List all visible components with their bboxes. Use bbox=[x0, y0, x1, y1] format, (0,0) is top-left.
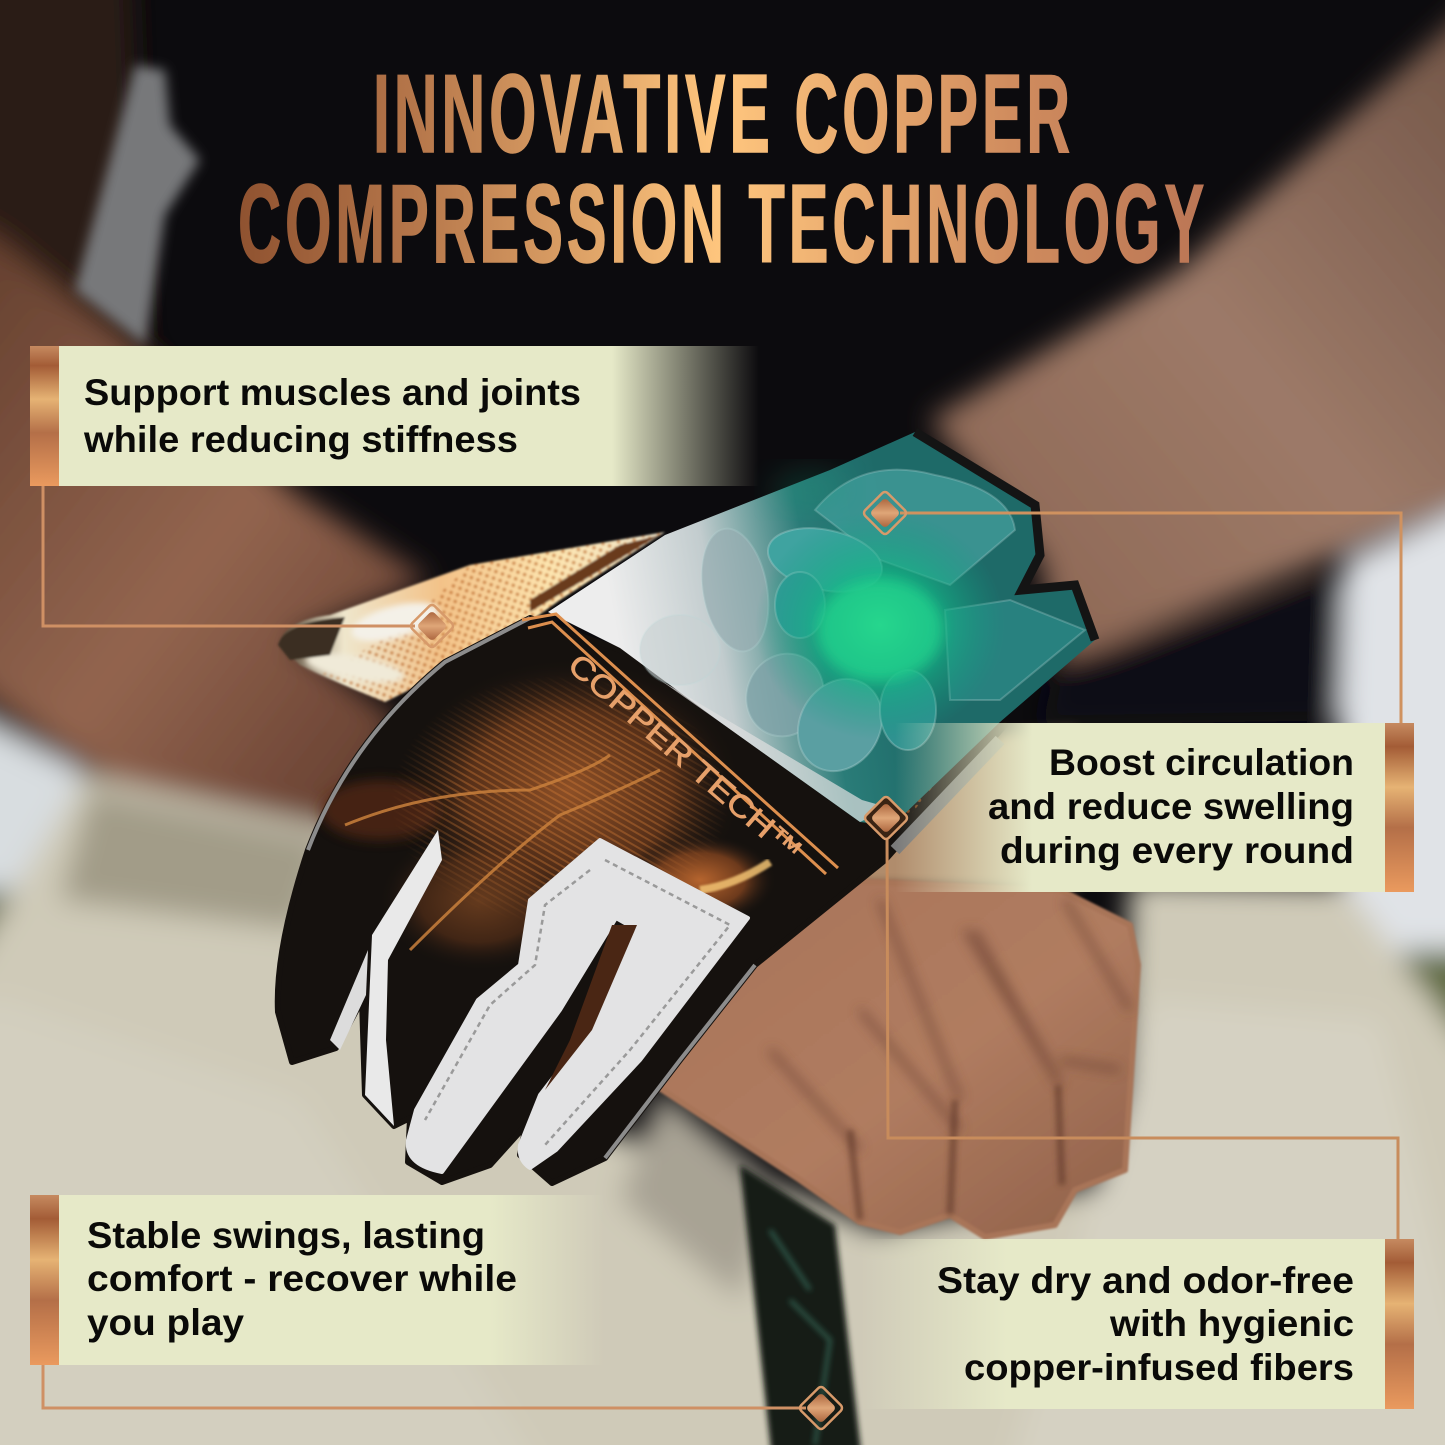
wrist bones bbox=[640, 470, 1085, 787]
copper band lines bbox=[522, 614, 838, 874]
connector: cuff to dry callout bbox=[863, 795, 1398, 1239]
marker diamond bbox=[409, 603, 455, 649]
title bbox=[238, 52, 1208, 286]
panel: stable swings bbox=[30, 1195, 604, 1365]
white stitched lower cuff bbox=[660, 680, 890, 822]
marker diamond bbox=[862, 490, 908, 536]
cuff: white to x-ray teal panel bbox=[548, 432, 1095, 826]
panel: boost circulation: Boost circulation bbox=[1049, 742, 1354, 783]
panel: stable swings: Stable swings, lasting bbox=[87, 1215, 485, 1256]
marker diamond bbox=[863, 795, 909, 841]
grey blurred object top left bbox=[75, 65, 200, 345]
wrist skin behind callout bbox=[830, 730, 1075, 890]
panel: stay dry: copper-infused fibers bbox=[964, 1347, 1354, 1388]
glove: second hand's thumb behind bbox=[278, 532, 665, 702]
hand gripping club bbox=[655, 880, 1138, 1445]
glove outer piping bbox=[308, 618, 755, 1158]
glove: main body with copper print bbox=[278, 432, 1095, 1183]
panel: support muscles and joints: Support muscles and joints bbox=[84, 372, 581, 413]
panel: stable swings: comfort - recover while bbox=[87, 1258, 517, 1299]
connector: wrist bones to circulation callout bbox=[862, 490, 1401, 723]
connector: bottom left callout to grip bbox=[43, 1365, 844, 1431]
white thumb inserts bbox=[365, 830, 442, 1126]
marker diamond bbox=[798, 1385, 844, 1431]
copper swoosh lines bbox=[345, 755, 770, 950]
panel: boost circulation: and reduce swelling bbox=[988, 786, 1354, 827]
glove brand text: COPPER TECH™ bbox=[561, 647, 809, 869]
panel: stay dry bbox=[860, 1239, 1414, 1409]
panel: support muscles and joints: while reducing stiffness bbox=[83, 419, 518, 460]
connector: top left callout to thumb bbox=[43, 486, 455, 649]
panel: stay dry: with hygienic bbox=[1109, 1303, 1354, 1344]
panel: boost circulation: during every round bbox=[1000, 830, 1354, 871]
panel: support muscles and joints bbox=[30, 346, 759, 486]
panel: stay dry: Stay dry and odor-free bbox=[937, 1260, 1354, 1301]
panel: stable swings: you play bbox=[87, 1302, 244, 1343]
green x-ray glow bbox=[755, 510, 1005, 740]
white palm patch bbox=[408, 840, 748, 1172]
glow halo beyond cuff bbox=[770, 468, 850, 512]
panel: boost circulation bbox=[895, 723, 1414, 892]
